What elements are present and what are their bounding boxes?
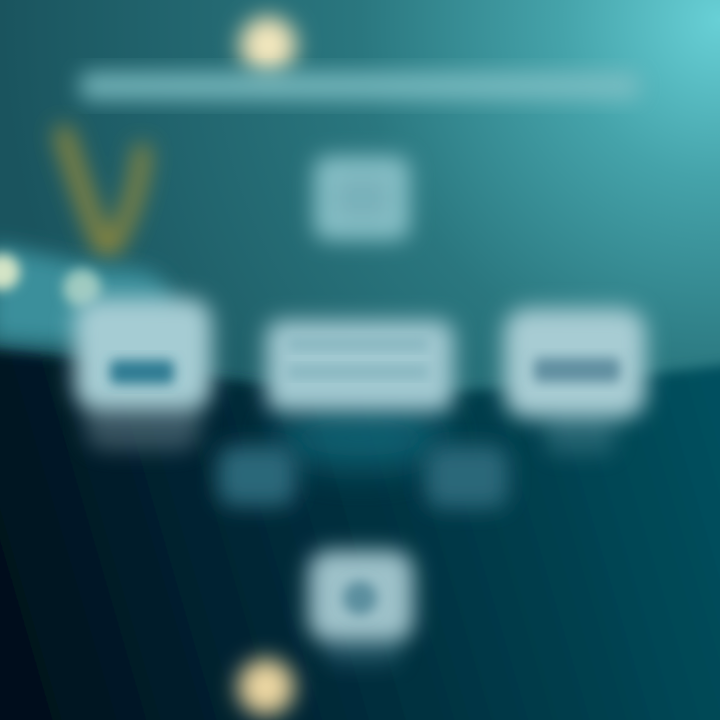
title bar: [80, 72, 640, 100]
icon: bottom sun: [237, 658, 295, 716]
glow under centre panel: [275, 408, 445, 468]
background: lower dark section: [0, 345, 720, 720]
icon: upper square: [314, 156, 410, 240]
icon: top sun: [239, 16, 297, 74]
panel: centre card: [266, 320, 454, 412]
wave on the left: [0, 245, 174, 345]
icon: lower left node: [218, 446, 296, 506]
icon: golden leaves: [64, 135, 142, 248]
small left orbs: [0, 254, 101, 307]
panel: right card: [504, 308, 646, 454]
panel: left card: [74, 298, 212, 450]
icon: lower right node: [426, 446, 508, 508]
icon: bottom square: [308, 550, 414, 666]
